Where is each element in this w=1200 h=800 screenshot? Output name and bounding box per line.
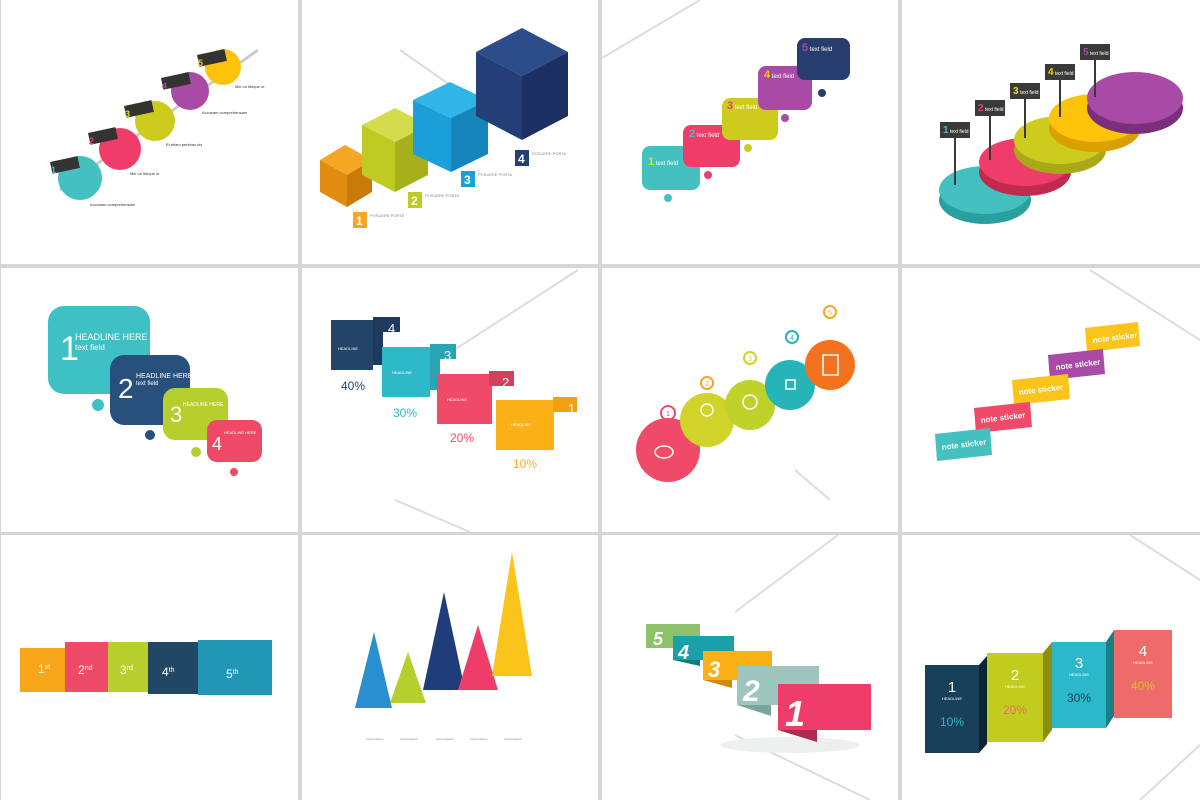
panel: folded tabs percent: 3 xyxy=(444,348,451,363)
panel: drop circles with icons xyxy=(636,306,855,482)
panel: folded tabs percent: 40% xyxy=(341,379,365,393)
panel: cubes: POSUERE PORTA xyxy=(532,151,566,156)
panel: speech bubbles: 3 text field xyxy=(727,100,757,112)
panel: cubes: 1 xyxy=(356,214,363,228)
panel: ordinal tabs: th xyxy=(233,669,239,676)
panel: ordinal tabs: 1 xyxy=(38,662,45,676)
panel: headline bubbles: 4 xyxy=(212,434,222,454)
panel: cubes: 2 xyxy=(411,194,418,208)
panel: cubes: 4 xyxy=(518,152,525,166)
panel: numbered ribbons: 5 xyxy=(653,629,664,649)
panel: numbered ribbons xyxy=(646,624,871,753)
panel: folded brochure: 4 xyxy=(1139,643,1147,660)
panel: headline bubbles: 3 xyxy=(170,402,182,427)
panel: headline bubbles: HEADLINE HERE xyxy=(183,402,224,408)
panel: headline bubbles: 1 xyxy=(60,330,79,368)
panel: circles timeline: Et etiam pertinax nis xyxy=(166,142,202,147)
panel: folded tabs percent: HEADLINE xyxy=(511,422,531,427)
panel: folded tabs percent: HEADLINE xyxy=(338,346,358,351)
panel: folded tabs percent: 10% xyxy=(513,457,537,471)
panel: folded tabs percent: 2 xyxy=(502,375,509,390)
panel: folded brochure: HEADLINE xyxy=(1069,672,1089,677)
panel: ordinal tabs: nd xyxy=(85,665,93,672)
panel: note stickers: note sticker xyxy=(1092,331,1138,345)
panel: folded tabs percent: 4 xyxy=(388,321,395,336)
panel: cubes xyxy=(320,28,568,228)
panel: circles timeline: 2 xyxy=(89,136,94,146)
panel: folded brochure: 3 xyxy=(1075,655,1083,672)
panel: folded tabs percent: 20% xyxy=(450,431,474,445)
panel: folded tabs percent: HEADLINE xyxy=(447,397,467,402)
panel: ordinal tabs: st xyxy=(45,664,50,671)
panel: folded brochure: 20% xyxy=(1003,703,1027,717)
panel: ordinal tabs: rd xyxy=(127,665,133,672)
panel: folded tabs percent: 1 xyxy=(568,401,575,416)
panel: ordinal tabs: 5 xyxy=(226,667,233,681)
panel: stacked disks xyxy=(939,44,1183,224)
panel: numbered ribbons: 1 xyxy=(785,693,805,734)
panel: cones: Lorem ipsum xyxy=(436,737,454,741)
panel: numbered ribbons: 4 xyxy=(677,642,689,664)
panel: cubes: 3 xyxy=(464,173,471,187)
panel: headline bubbles: 2 xyxy=(118,373,134,404)
panel: note stickers xyxy=(935,322,1140,461)
panel: cones: Lorem ipsum xyxy=(400,737,418,741)
panel: note stickers: note sticker xyxy=(941,438,987,452)
panel: ordinal tabs: 3 xyxy=(120,663,127,677)
panel: folded brochure: HEADLINE xyxy=(1133,660,1153,665)
panel: circles timeline: 1 xyxy=(51,165,56,175)
panel: speech bubbles xyxy=(642,38,850,202)
panel: circles timeline: Accusam comprehensam xyxy=(202,110,248,115)
panel: note stickers: note sticker xyxy=(1018,383,1064,397)
panel: folded brochure: 10% xyxy=(940,715,964,729)
panel: folded brochure: 2 xyxy=(1011,667,1019,684)
panel: ordinal tabs: 2 xyxy=(78,663,85,677)
panel: headline bubbles: HEADLINE HERE xyxy=(136,373,193,380)
panel: cubes: POSUERE PORTA xyxy=(425,193,459,198)
panel: headline bubbles: text field xyxy=(75,343,105,352)
panel: folded tabs percent: HEADLINE xyxy=(392,370,412,375)
panel: cones: Lorem ipsum xyxy=(504,737,522,741)
panel: speech bubbles: 4 text field xyxy=(764,69,794,81)
panel: speech bubbles: 5 text field xyxy=(802,42,832,54)
panel: note stickers: note sticker xyxy=(980,411,1026,425)
panel: folded brochure: HEADLINE xyxy=(1005,684,1025,689)
panel: circles timeline: 4 xyxy=(162,81,167,91)
panel: folded brochure: 40% xyxy=(1131,679,1155,693)
panel: ordinal tabs: 4 xyxy=(162,665,169,679)
panel: cones xyxy=(355,552,532,741)
panel: speech bubbles: 2 text field xyxy=(689,128,719,140)
panel: headline bubbles: text field xyxy=(136,381,158,387)
panel: stacked disks: 1 text field xyxy=(943,125,969,136)
panel: headline bubbles: HEADLINE HERE xyxy=(75,332,148,342)
panel: folded brochure: HEADLINE xyxy=(942,696,962,701)
panel: folded brochure: 30% xyxy=(1067,691,1091,705)
panel: circles timeline: 3 xyxy=(125,109,130,119)
panel: stacked disks: 3 text field xyxy=(1013,86,1039,97)
panel: stacked disks: 2 text field xyxy=(978,103,1004,114)
panel: headline bubbles xyxy=(48,306,262,476)
panel: note stickers: note sticker xyxy=(1055,358,1101,372)
panel: cubes: POSUERE PORTA xyxy=(370,213,404,218)
panel: folded tabs percent: 30% xyxy=(393,406,417,420)
panel: headline bubbles: HEADLINE HERE xyxy=(224,430,257,435)
panel: cones: Lorem ipsum xyxy=(470,737,488,741)
panel: drop circles with icons: 5 xyxy=(828,310,832,317)
panel: circles timeline: Mel ori tibique ut xyxy=(130,171,160,176)
panel: ordinal tabs xyxy=(20,640,272,695)
panel: folded tabs percent xyxy=(331,317,577,471)
panel: numbered ribbons: 2 xyxy=(742,675,760,708)
panel: folded brochure: 1 xyxy=(948,679,956,696)
panel: drop circles with icons: 3 xyxy=(748,356,752,363)
panel: circles timeline: Mel ori tibique ut xyxy=(235,84,265,89)
panel: numbered ribbons: 3 xyxy=(708,657,720,682)
panel: folded brochure xyxy=(925,630,1172,753)
panel: cones: Lorem ipsum xyxy=(366,737,384,741)
panel: cubes: POSUERE PORTA xyxy=(478,172,512,177)
panel: speech bubbles: 1 text field xyxy=(648,156,678,168)
panel: stacked disks: 4 text field xyxy=(1048,67,1074,78)
panel: drop circles with icons: 4 xyxy=(790,335,794,342)
panel: drop circles with icons: 1 xyxy=(666,411,670,418)
panel: circles timeline: 5 xyxy=(198,58,203,68)
panel: ordinal tabs: th xyxy=(169,667,175,674)
panel: circles timeline: Accusam comprehensam xyxy=(90,202,136,207)
panel: circles timeline xyxy=(50,49,265,207)
panel: stacked disks: 5 text field xyxy=(1083,47,1109,58)
panel: drop circles with icons: 2 xyxy=(705,381,709,388)
